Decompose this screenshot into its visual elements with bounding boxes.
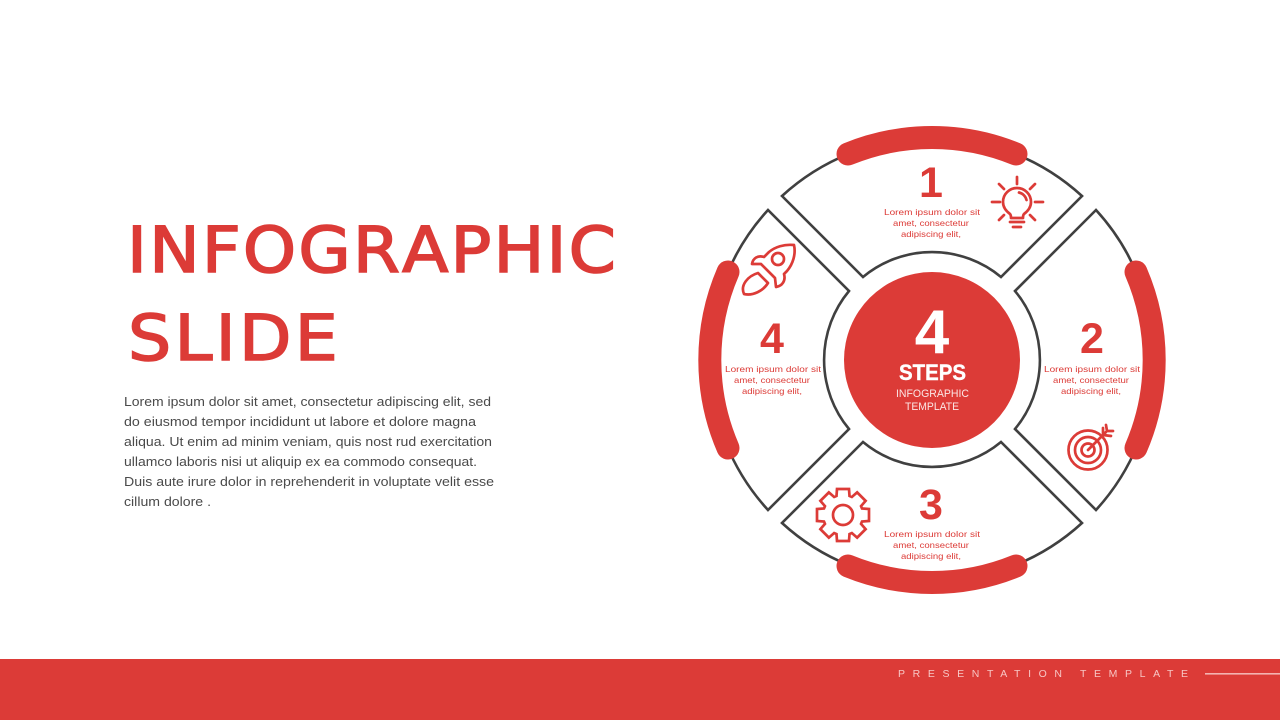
panel: step 1 — [782, 137, 1082, 277]
center heading: STEPS — [899, 360, 966, 385]
center subtitle: INFOGRAPHIC — [896, 388, 969, 400]
step 4 text: adipiscing elit, — [742, 386, 802, 396]
step 1 text: Lorem ipsum dolor sit — [884, 207, 981, 217]
step 3 number: 3 — [919, 481, 943, 529]
body text block: Lorem ipsum dolor sit amet, consectetur adipiscing elit, sed — [124, 395, 491, 409]
icon: target — [1068, 425, 1113, 470]
body text block: ullamco laboris nisi ut aliquip ex ea commodo consequat. — [124, 455, 477, 469]
step 1 text: amet, consectetur — [893, 218, 969, 228]
step 2 text: Lorem ipsum dolor sit — [1044, 364, 1141, 374]
title — [127, 214, 618, 375]
center subtitle: TEMPLATE — [905, 401, 959, 413]
step 3 text: amet, consectetur — [893, 540, 969, 550]
center subtitle — [896, 388, 969, 413]
footer label: PRESENTATION TEMPLATE — [898, 668, 1188, 680]
step 4 text: amet, consectetur — [734, 375, 810, 385]
step 4 text — [725, 364, 822, 396]
step 1 text: adipiscing elit, — [901, 229, 961, 239]
step 4 number: 4 — [760, 315, 784, 363]
step 4 accent arc — [710, 272, 728, 448]
step 2 number: 2 — [1080, 315, 1104, 363]
body text block: aliqua. Ut enim ad minim veniam, quis nost rud exercitation — [124, 435, 492, 449]
body text block — [124, 395, 494, 509]
icon: light bulb — [992, 177, 1043, 227]
center big number: 4 — [915, 298, 950, 367]
step 3 text — [884, 529, 981, 561]
step 2 accent arc — [1136, 272, 1154, 448]
step 1 accent arc — [848, 137, 1016, 154]
step 3 text: adipiscing elit, — [901, 551, 961, 561]
step 2 text — [1044, 364, 1141, 396]
body text block: cillum dolore . — [124, 495, 211, 509]
panel: step 3 — [782, 442, 1082, 583]
center circle — [844, 272, 1020, 448]
step 3 accent arc — [848, 566, 1016, 583]
icon: gear — [817, 489, 869, 541]
step 2 text: adipiscing elit, — [1061, 386, 1121, 396]
title: SLIDE — [128, 302, 341, 375]
step 3 text: Lorem ipsum dolor sit — [884, 529, 981, 539]
step 1 text — [884, 207, 981, 239]
title: INFOGRAPHIC — [127, 214, 618, 287]
step 2 text: amet, consectetur — [1053, 375, 1129, 385]
panel: step 4 — [710, 210, 849, 510]
step 1 number: 1 — [919, 159, 943, 207]
panel: step 2 — [1015, 210, 1154, 510]
step 4 text: Lorem ipsum dolor sit — [725, 364, 822, 374]
body text block: Duis aute irure dolor in reprehenderit in voluptate velit esse — [124, 475, 494, 489]
body text block: do eiusmod tempor incididunt ut labore et dolore magna — [124, 415, 476, 429]
footer bar — [0, 659, 1280, 720]
icon: rocket — [743, 245, 795, 294]
